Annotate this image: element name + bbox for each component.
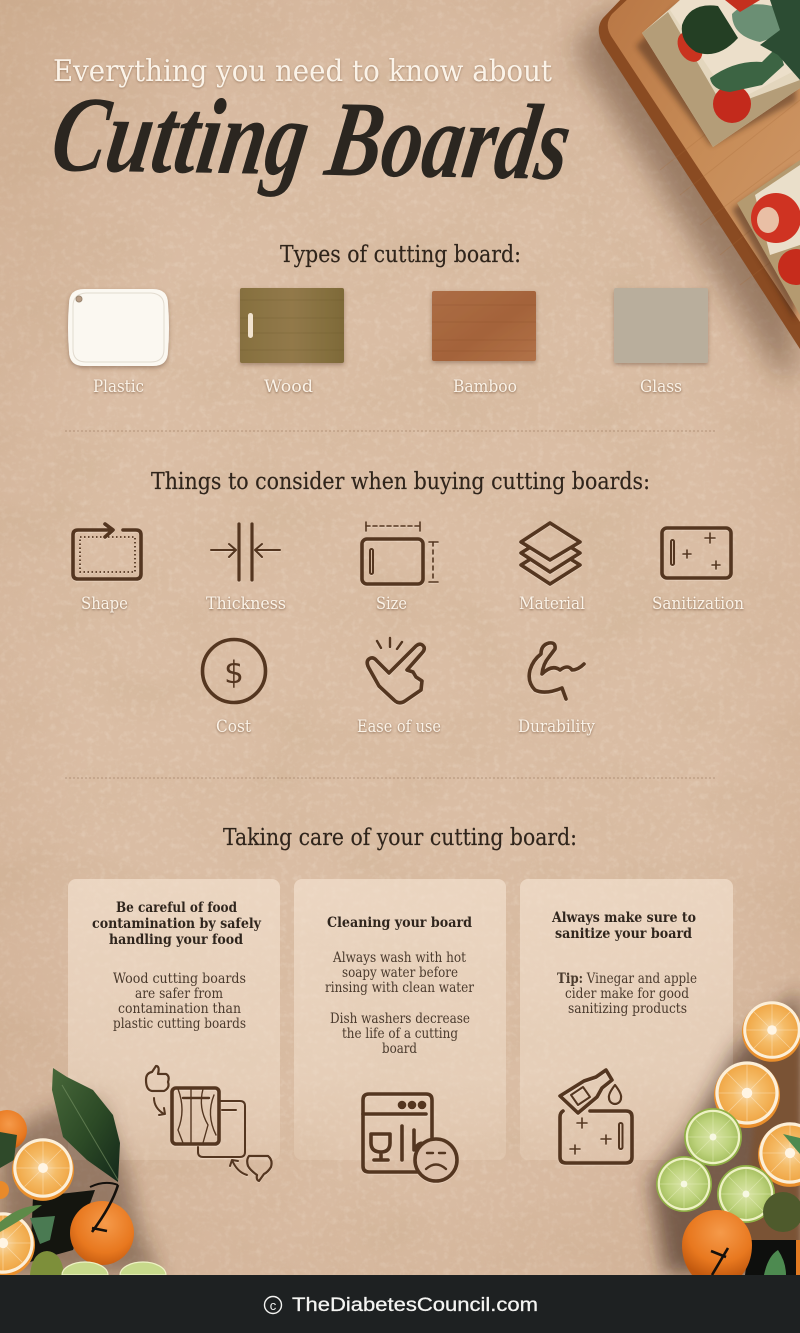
panel title: contamination by safely [92,916,262,932]
panel body: are safer from [135,986,223,1002]
label: shape: Shape [81,594,128,614]
board: glass [614,288,708,363]
photo: citrus bottom left [0,1068,166,1277]
panel body: Always wash with hot [332,950,466,966]
label: size: Size [376,594,407,614]
label: wood: Wood [264,377,313,397]
panel title [92,900,262,948]
main title: Cutting Boards [44,75,579,203]
panel body: Dish washers decrease [330,1011,470,1027]
panel: food contamination [68,879,280,1160]
panel body: sanitizing products [568,1001,687,1017]
label: durability: Durability [518,717,595,737]
icon: material [521,523,580,584]
section: things to consider [73,469,744,737]
icon: cost [202,640,266,702]
panel body [113,971,246,1032]
title [44,54,579,203]
panel body: cider make for good [565,986,689,1002]
footer bar [0,1275,800,1333]
panel title: handling your food [109,932,243,948]
icon: shape [73,524,141,579]
icon: cost: $ [224,655,244,691]
panel body: contamination than [118,1001,241,1017]
icon: copyright: c [270,1298,277,1313]
panel: cleaning [294,879,506,1160]
label: bamboo: Bamboo [453,377,517,397]
photo: wooden board with toast [577,0,800,384]
website: TheDiabetesCouncil.com [292,1294,538,1316]
label: material: Material [519,594,585,614]
panel title: Cleaning your board [327,915,472,931]
icon: ease of use [367,638,424,703]
panel body: rinsing with clean water [325,980,474,996]
icon: boards with thumbs [146,1066,272,1181]
heading: Types of cutting board: [280,242,521,268]
panel title: Be careful of food [116,900,237,916]
panel title: Always make sure to [551,910,696,926]
icon: thickness [211,524,280,580]
panel body [325,950,474,1057]
panel body: soapy water before [342,965,458,981]
icon: bottle and board [560,1070,632,1163]
panel: sanitizing [520,879,733,1160]
label: thickness: Thickness [206,594,286,614]
panel body: plastic cutting boards [113,1016,246,1032]
board: wood [240,288,344,363]
panel body [557,971,697,1017]
icon: copyright [264,1296,282,1314]
label: cost: Cost [216,717,251,737]
panel title [551,910,696,942]
board: bamboo [432,291,536,361]
label: sanitization: Sanitization [652,594,744,614]
icon: durability [529,643,584,699]
panel body: Wood cutting boards [113,971,246,987]
subtitle: Everything you need to know about [53,54,552,89]
panel body: the life of a cutting [342,1026,458,1042]
section: types of cutting board [68,242,708,397]
photo: citrus bottom right [650,990,800,1275]
heading: Things to consider when buying cutting boards: [151,469,650,495]
icon: dishwasher with sad face [363,1094,457,1181]
label: plastic: Plastic [93,377,144,397]
heading: taking care: Taking care of your cutting board: [223,825,577,851]
label: ease of use: Ease of use [357,717,441,737]
board: plastic [68,289,169,366]
panel body: Tip: Vinegar and apple [557,971,697,987]
panel body: board [382,1041,417,1057]
panel title: sanitize your board [555,926,692,942]
label: glass: Glass [640,377,682,397]
icon: sanitization [662,528,731,578]
icon: size [362,522,438,584]
